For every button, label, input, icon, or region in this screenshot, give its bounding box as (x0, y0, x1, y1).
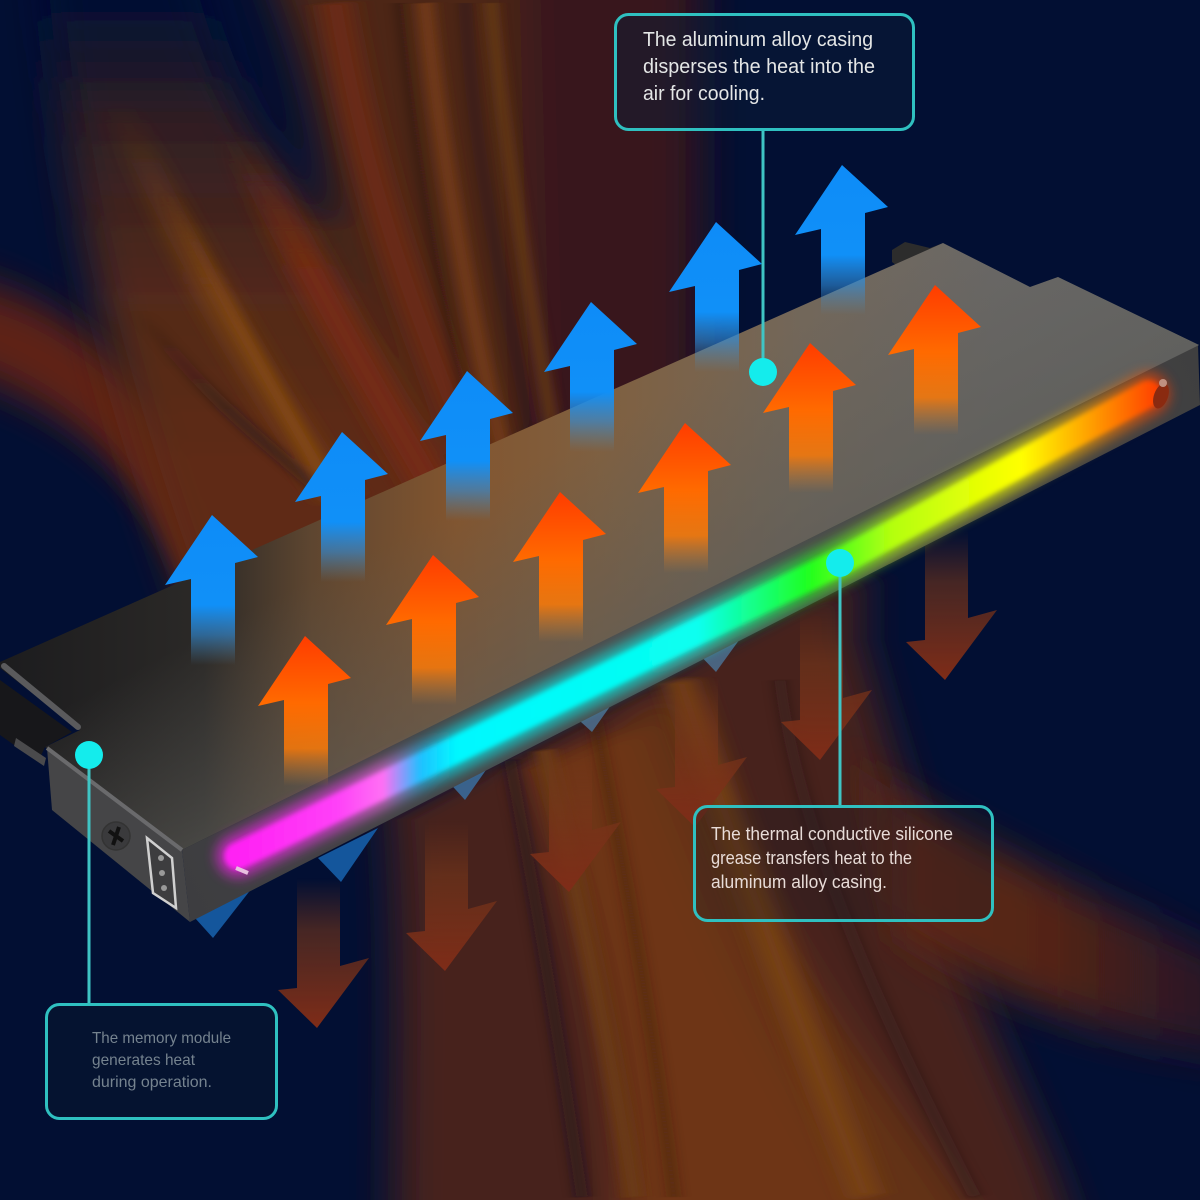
top face (0, 243, 1199, 850)
upward blue arrows (165, 165, 888, 665)
memory heatsink module (0, 242, 1200, 922)
callout: memory module: generates heat (92, 1052, 196, 1069)
downward heat arrows (278, 530, 997, 1028)
top rim (4, 666, 78, 727)
port (147, 838, 176, 908)
callout: silicone grease: The thermal conductive silicone (711, 824, 953, 844)
left connector (0, 680, 72, 766)
callout: silicone grease: grease transfers heat to the (711, 848, 912, 868)
connector tab (892, 242, 943, 268)
callout: memory module: during operation. (92, 1074, 212, 1091)
RGB light bar (236, 379, 1172, 873)
blue arrows behind the module (195, 625, 750, 938)
callout: aluminum casing (616, 14, 914, 386)
top face shading near bar (0, 243, 1199, 850)
upward orange arrows (258, 285, 981, 786)
callout: silicone grease: aluminum alloy casing. (711, 872, 887, 892)
front face (182, 345, 1200, 922)
callout: aluminum casing: air for cooling. (643, 83, 765, 105)
callout: memory module: The memory module (92, 1030, 231, 1047)
icon: screw (102, 822, 130, 850)
side face (47, 748, 190, 922)
side rim highlight (47, 748, 182, 850)
callout: memory module (46, 741, 276, 1118)
callout: aluminum casing: The aluminum alloy casing (643, 29, 873, 51)
callout: silicone grease (694, 549, 992, 920)
callout: aluminum casing: disperses the heat into the (643, 56, 875, 78)
